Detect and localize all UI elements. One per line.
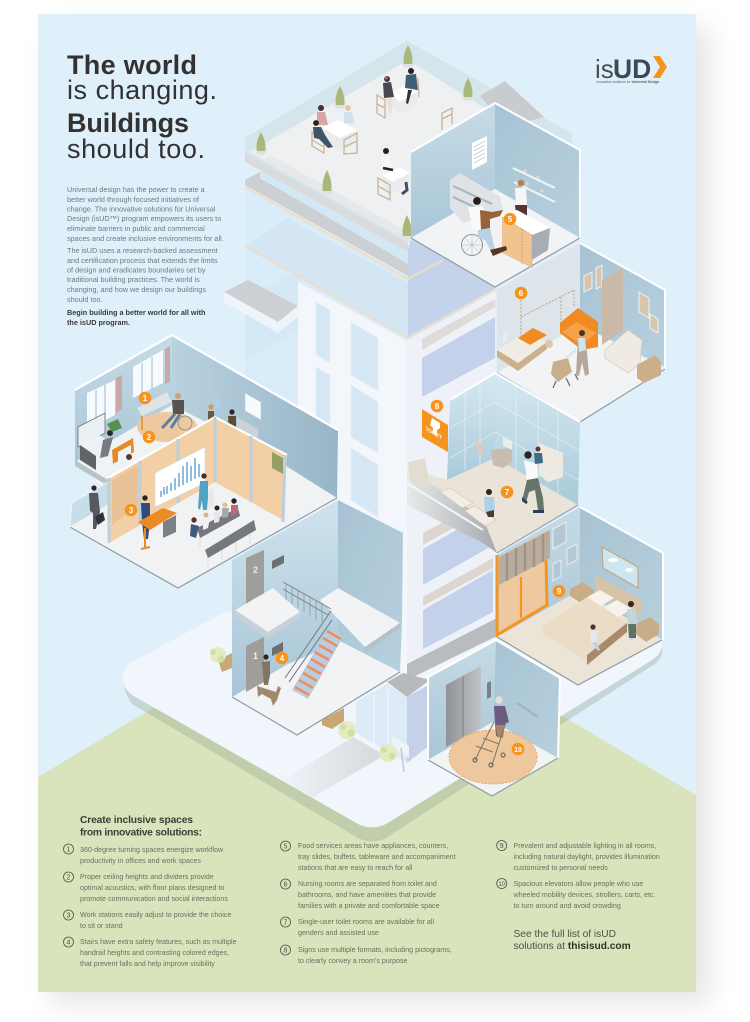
item 2: 2 [67, 874, 71, 882]
glass partition orange panels [108, 417, 215, 543]
turning circle floor [137, 412, 197, 442]
toilet [476, 437, 512, 468]
standing desk [137, 392, 172, 416]
floor [407, 458, 578, 553]
upper floor [75, 405, 222, 492]
glass low wall [70, 482, 108, 527]
item 4: Stairs have extra safety features, such as multiple [80, 938, 237, 946]
badge 7 [501, 486, 513, 498]
table group left [312, 105, 357, 154]
badge 4: 4 [280, 654, 285, 663]
framed picture [602, 547, 638, 588]
item 10: Spacious elevators allow people who use [514, 880, 643, 888]
mother [576, 330, 589, 376]
presenter [198, 473, 214, 510]
title: should too. [67, 134, 205, 164]
woman with guide dogs [257, 654, 281, 706]
logo: isUD: UD [613, 54, 651, 84]
man with briefcase [89, 485, 105, 529]
two standing colleagues [208, 393, 261, 452]
badge 7: 7 [505, 488, 510, 497]
item 8: 8 [284, 948, 288, 954]
windows [87, 350, 163, 430]
badge 3 [125, 504, 137, 516]
stroller [551, 350, 578, 388]
hand dryer [408, 458, 430, 490]
terrace floor [250, 60, 560, 241]
badge 6: 6 [519, 289, 524, 298]
badge 9: 9 [557, 587, 562, 596]
intro text [67, 185, 224, 327]
item 5: 5 [284, 844, 288, 850]
ground [38, 590, 696, 992]
item 5: stations that are easy to reach for all [298, 864, 413, 872]
entry walkway [283, 737, 385, 797]
badge 2: 2 [147, 433, 152, 442]
child [484, 489, 495, 517]
elevator doors [446, 666, 481, 747]
shutter window [472, 136, 487, 170]
bedside table [637, 355, 661, 383]
shrub entrance left [338, 721, 356, 739]
curtain [602, 268, 623, 345]
terrace slab edge [245, 153, 408, 252]
building tower [224, 168, 497, 680]
glass railing [245, 40, 572, 243]
item 1 [64, 844, 224, 865]
panel: stairwell (item 4) [232, 500, 403, 735]
entrance sign post [392, 736, 409, 758]
baby changer [539, 443, 563, 482]
item 5: tray slides, buffets, tableware and accompaniment [298, 853, 456, 861]
orange armchair [560, 308, 598, 350]
panel: office room (items 1-3) [70, 335, 338, 588]
item 3: 3 [67, 912, 71, 920]
bed [543, 590, 632, 665]
item 5 [280, 841, 456, 872]
badge 1 [139, 392, 151, 404]
badge 1: 1 [143, 394, 148, 403]
balcony [224, 280, 298, 322]
call to action: solutions at thisisud.com [514, 941, 631, 952]
item 3: to sit or stand [80, 922, 123, 930]
woman with walker [473, 696, 509, 767]
light face beside the tower [245, 270, 298, 360]
panel: elevator room (item 10) [428, 640, 560, 796]
item 1: productivity in offices and work spaces [80, 857, 201, 865]
door 1 [246, 637, 283, 692]
bench by entrance [322, 708, 344, 729]
item 2: optimal acoustics, with floor plans designed to [80, 884, 224, 892]
table group top [377, 68, 419, 118]
item 9: customized to personal needs [514, 864, 608, 872]
solutions heading: from innovative solutions: [80, 828, 202, 838]
wall shelves [513, 168, 555, 202]
headboard [595, 575, 642, 617]
item 2: promote communication and social interactions [80, 895, 228, 903]
solutions list column 1 [64, 844, 237, 968]
intro text: spaces and create inclusive environments for all. [67, 234, 224, 243]
solutions heading [80, 815, 202, 838]
woman [627, 601, 637, 640]
call to action [514, 929, 631, 952]
title: is changing. [67, 75, 217, 105]
building entrance [356, 673, 430, 772]
skylight [480, 81, 544, 127]
orange window [497, 530, 547, 635]
gray soffit strip [245, 172, 408, 276]
pale upper setback [245, 187, 408, 480]
white armchair [605, 330, 642, 373]
wheelchair user [162, 393, 192, 430]
intro text: the isUD program. [67, 318, 130, 327]
badge 10 [512, 743, 524, 755]
badge 8: 8 [435, 402, 440, 411]
item 10: 10 [498, 882, 506, 888]
toilet sign (item 8): TOILET [426, 426, 443, 442]
item 9: 9 [500, 843, 504, 850]
screen with bar chart [155, 447, 205, 507]
item 3 [64, 910, 231, 930]
item 7: genders and assisted use [298, 929, 379, 937]
audience benches [190, 498, 256, 568]
badge 4 [276, 652, 288, 664]
title [67, 50, 217, 164]
item 4: handrail heights and contrasting colored edges, [80, 949, 229, 957]
item 4: 4 [67, 940, 71, 946]
item 10: to turn around and avoid crowding [514, 902, 621, 910]
shrub entrance right [379, 744, 397, 762]
panel: nursing room (item 6) [497, 243, 665, 422]
walls [232, 500, 338, 697]
wall art [553, 522, 577, 581]
changing table [497, 328, 553, 371]
intro text: changing, and how we design our buildings [67, 285, 206, 294]
intro text: better world through focused initiatives of [67, 195, 200, 204]
counter [498, 210, 550, 268]
back walls [75, 335, 172, 462]
upper left landing [235, 588, 300, 632]
badge 9 [553, 585, 565, 597]
item 7: 7 [284, 920, 288, 926]
upper right landing [320, 588, 400, 647]
title: The world [67, 50, 197, 80]
plant on wall [272, 452, 283, 474]
grab bar [517, 703, 538, 717]
door 1: 1 [253, 651, 258, 661]
title: Buildings [67, 108, 189, 138]
solutions list column 2 [280, 841, 456, 965]
bedside tables [570, 582, 659, 642]
logo: isUD: Innovative solutions for Universal Design [596, 80, 659, 84]
badge 5 [504, 213, 516, 225]
logo: isUD: is [595, 54, 614, 84]
intro text: eliminate barriers in public and commercial [67, 224, 205, 233]
base platform [122, 550, 662, 842]
wall art [584, 265, 658, 333]
large light face under the roof [245, 218, 408, 337]
logo: isUD [595, 54, 667, 84]
child on bed [590, 624, 600, 651]
spare chair [442, 108, 452, 130]
intro text: of design and eradicates boundaries set by [67, 266, 206, 274]
icon: logo chevron [653, 56, 667, 78]
intro text: change. The innovative solutions for Universal [67, 204, 216, 214]
food display case [450, 173, 503, 223]
intro text: Universal design has the power to create a [67, 185, 206, 194]
sinks [440, 488, 496, 526]
door 2 [246, 550, 284, 605]
ground floor slab [232, 642, 400, 735]
planters [255, 45, 474, 240]
item 3: Work stations easily adjust to provide the choice [80, 911, 231, 919]
item 6: Nursing rooms are separated from toilet and [298, 880, 437, 888]
barista [515, 180, 527, 218]
item 6 [280, 879, 440, 910]
item 2: Proper ceiling heights and dividers provide [80, 873, 214, 881]
left facade [298, 282, 407, 673]
item 7: Single-user toilet rooms are available for all [298, 918, 434, 926]
windows left facade [316, 302, 378, 517]
item 4 [64, 937, 237, 968]
intro text: should too. [67, 295, 103, 304]
call panel [487, 681, 491, 699]
intro text: traditional building practices. The world is [67, 275, 200, 284]
item 4: that prevent falls and help improve visibility [80, 960, 215, 968]
item 6: 6 [284, 882, 288, 888]
door 2: 2 [253, 565, 258, 575]
table group bottom [378, 148, 410, 200]
item 9 [497, 840, 660, 872]
item 1: 360-degree turning spaces energize workflow [80, 846, 224, 854]
badge 3: 3 [129, 506, 134, 515]
panel: toilet room (item 7) [407, 373, 580, 553]
item 10: wheeled mobility devices, strollers, carts, etc. [512, 891, 655, 899]
lower floor [70, 437, 337, 588]
toilet sign (item 8) [422, 400, 448, 452]
workstation [78, 413, 134, 470]
panel: bedroom (item 9) [497, 507, 663, 685]
father and baby [522, 446, 544, 513]
item 5: Food services areas have appliances, counters, [298, 842, 448, 850]
item 8 [280, 945, 452, 965]
item 8: to clearly convey a room’s purpose [298, 957, 408, 965]
item 7 [280, 917, 434, 937]
solutions list column 3 [497, 840, 660, 910]
panel: cafe room (item 5) [411, 103, 580, 287]
item 8: Signs use multiple formats, including pictograms, [298, 946, 452, 954]
solutions heading: Create inclusive spaces [80, 815, 193, 826]
handrails [285, 611, 332, 682]
rooftop terrace [245, 40, 572, 252]
intro text: Design (isUD™) program empowers its users to [67, 214, 221, 223]
right facade [407, 291, 497, 673]
item 1: 1 [67, 846, 71, 854]
roller curtain [499, 530, 550, 585]
item 2 [64, 872, 228, 903]
item 6: bathrooms, and have amenities that provide [298, 891, 436, 899]
lavender upper wall [408, 238, 495, 338]
intro text: Begin building a better world for all with [67, 308, 205, 317]
orange sit-stand desk and user [138, 495, 177, 549]
intro text: and certification process that extends the limits [67, 256, 218, 265]
badge 10: 10 [514, 747, 522, 754]
dashed clearance [521, 290, 574, 345]
man in wheelchair [462, 197, 507, 256]
ledge [407, 468, 497, 553]
badge 6 [515, 287, 527, 299]
item 10 [497, 878, 655, 910]
staircase [283, 582, 343, 699]
item 9: Prevalent and adjustable lighting in all rooms, [514, 842, 656, 850]
item 9: including natural daylight, provides illumination [514, 853, 660, 861]
call to action: See the full list of isUD [514, 929, 616, 940]
recessed wall under terrace [260, 168, 408, 268]
intro text: The isUD uses a research-backed assessment [67, 246, 218, 255]
bench and shrub by stairs [210, 647, 232, 672]
badge 5: 5 [508, 215, 513, 224]
turning circle [449, 730, 537, 784]
badge 2 [143, 431, 155, 443]
item 6: families with a private and comfortable space [298, 902, 440, 910]
